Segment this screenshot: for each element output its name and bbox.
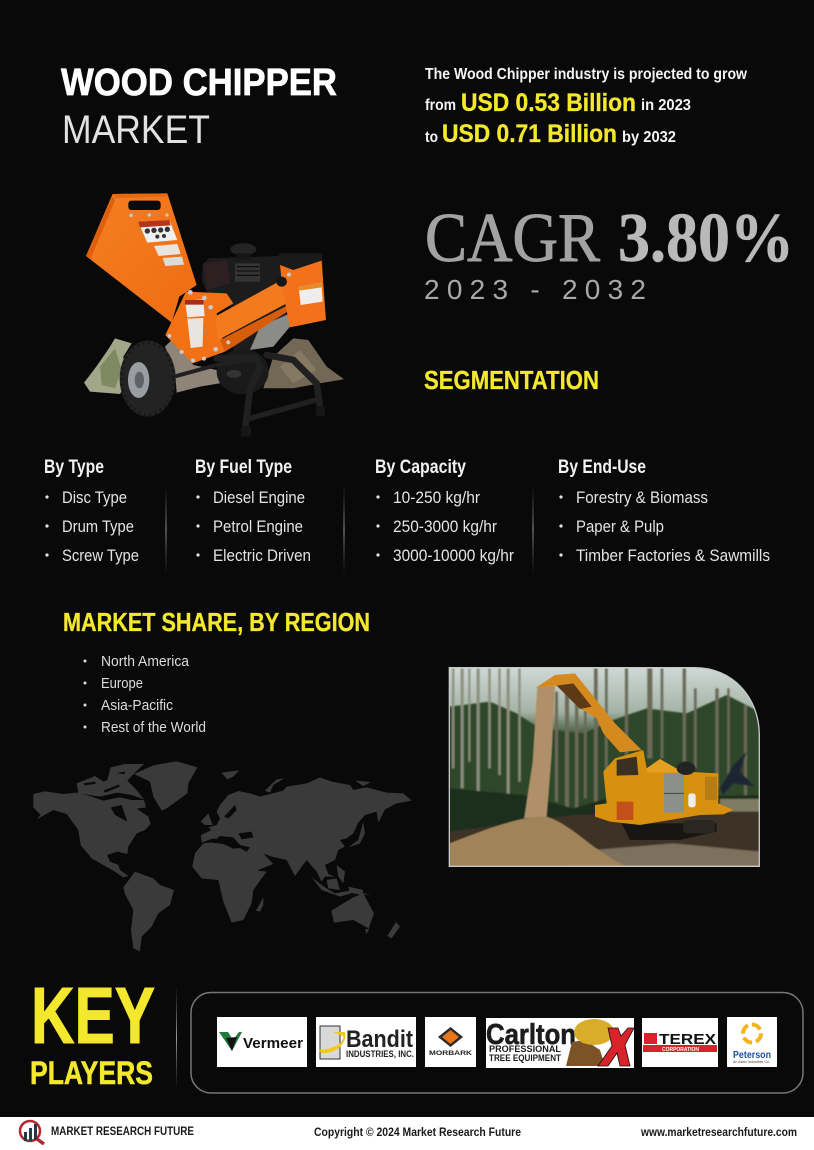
madagascar xyxy=(256,898,263,912)
chip pile xyxy=(449,817,627,866)
growth projection text: by 2032 xyxy=(622,129,676,146)
new zealand xyxy=(365,922,400,938)
icon: orange wood chipper product photo xyxy=(84,193,344,437)
logo: terex xyxy=(642,1018,718,1067)
logo: bandit xyxy=(316,1017,416,1067)
segment column: by end-use: Paper & Pulp xyxy=(576,517,664,536)
logo: vermeer xyxy=(217,1017,307,1067)
segment column: by fuel type xyxy=(195,457,311,565)
logo: morbark xyxy=(425,1017,476,1067)
segment column: by end-use: Timber Factories & Sawmills xyxy=(576,546,770,565)
region list: North America xyxy=(101,653,190,670)
logo: terex: TEREX xyxy=(659,1031,716,1048)
logo: peterson xyxy=(727,1017,777,1067)
growth projection text: USD 0.53 Billion xyxy=(461,89,636,117)
segment column: by type: Drum Type xyxy=(62,517,134,536)
forest background xyxy=(449,668,760,868)
title xyxy=(61,62,337,152)
logo: bandit: Bandit xyxy=(346,1026,413,1053)
segment column: by fuel type: Petrol Engine xyxy=(213,517,303,536)
growth projection text xyxy=(425,66,747,148)
key players heading: KEY xyxy=(31,971,155,1060)
southeast asia islands xyxy=(312,865,371,897)
title: MARKET xyxy=(62,108,210,152)
segment column: by fuel type: Diesel Engine xyxy=(213,488,305,507)
logo: carlton: Carlton xyxy=(486,1019,576,1051)
front wheel xyxy=(120,341,176,417)
chipper body xyxy=(595,750,733,825)
heading: segmentation: SEGMENTATION xyxy=(424,365,599,395)
logo: vermeer: Vermeer xyxy=(243,1035,303,1052)
logo: carlton xyxy=(486,1018,634,1068)
logo: peterson: Peterson xyxy=(733,1050,771,1061)
segment column: by end-use: By End-Use xyxy=(558,457,646,478)
photo: industrial tracked wood chipper in forest xyxy=(449,668,760,868)
greenland xyxy=(134,761,197,811)
iceland xyxy=(221,770,239,779)
growth projection text: to xyxy=(425,129,438,146)
logo: morbark: MORBARK xyxy=(429,1051,473,1057)
segment column: by capacity: By Capacity xyxy=(375,457,466,478)
growth projection text: in 2023 xyxy=(641,97,691,114)
segment column: by type xyxy=(44,457,139,565)
segment column: by type: By Type xyxy=(44,457,104,478)
segment column: by type: Disc Type xyxy=(62,488,127,507)
arctic islands xyxy=(77,764,144,799)
logo: terex: CORPORATION xyxy=(662,1047,699,1053)
british isles xyxy=(201,813,213,825)
africa xyxy=(192,841,267,923)
footer bar xyxy=(0,1117,814,1150)
japan xyxy=(348,822,365,847)
falling chips xyxy=(524,686,555,818)
stand frame xyxy=(177,355,321,430)
inland water xyxy=(83,771,253,863)
logo: carlton: TREE EQUIPMENT xyxy=(489,1053,561,1063)
key players heading xyxy=(30,971,155,1091)
region list: Rest of the World xyxy=(101,719,206,736)
segment column: by fuel type: Electric Driven xyxy=(213,546,311,565)
discharge boom xyxy=(536,673,642,752)
CAGR figure: CAGR xyxy=(425,200,600,277)
heading: market share by region: MARKET SHARE, BY REGION xyxy=(63,607,370,637)
CAGR figure: 3.80% xyxy=(618,200,794,277)
logo: carlton: PROFESSIONAL xyxy=(489,1044,562,1054)
australia xyxy=(331,893,374,928)
logo: bandit: INDUSTRIES, INC. xyxy=(346,1049,414,1059)
key players heading: PLAYERS xyxy=(30,1055,153,1091)
region list: Asia-Pacific xyxy=(101,697,173,714)
segment column: by capacity: 10-250 kg/hr xyxy=(393,488,480,507)
segment column: by fuel type: By Fuel Type xyxy=(195,457,292,478)
CAGR figure: 2023 - 2032 xyxy=(424,274,646,305)
segment column: by capacity xyxy=(375,457,514,565)
world map xyxy=(33,761,412,951)
title: WOOD CHIPPER xyxy=(61,62,337,104)
segment column: by capacity: 250-3000 kg/hr xyxy=(393,517,497,536)
lower housing and arm xyxy=(129,213,326,363)
segment column: by end-use: Forestry & Biomass xyxy=(576,488,708,507)
CAGR figure xyxy=(424,200,794,305)
russian far east island and arctic strips xyxy=(265,778,371,793)
footer bar: MARKET RESEARCH FUTURE xyxy=(51,1124,194,1138)
footer bar: Copyright © 2024 Market Research Future xyxy=(314,1125,521,1139)
south america xyxy=(123,872,174,951)
segment column: by capacity: 3000-10000 kg/hr xyxy=(393,546,514,565)
growth projection text: from xyxy=(425,97,456,114)
region list: Europe xyxy=(101,675,143,692)
machine tracks xyxy=(622,820,717,840)
key players logo panel xyxy=(191,992,803,1093)
growth projection text: The Wood Chipper industry is projected to grow xyxy=(425,66,747,83)
eurasia xyxy=(201,777,412,882)
growth projection text: USD 0.71 Billion xyxy=(442,120,617,148)
segment column: by type: Screw Type xyxy=(62,546,139,565)
wood chip piles xyxy=(84,338,344,394)
rear wheel xyxy=(217,349,269,394)
engine xyxy=(202,243,323,352)
north america xyxy=(33,791,151,877)
segment column: by end-use xyxy=(558,457,770,565)
logo: peterson: An Astec Industries Co. xyxy=(733,1060,770,1064)
region list xyxy=(84,653,206,736)
hopper xyxy=(86,193,197,323)
icon: market research future logo xyxy=(20,1121,44,1144)
